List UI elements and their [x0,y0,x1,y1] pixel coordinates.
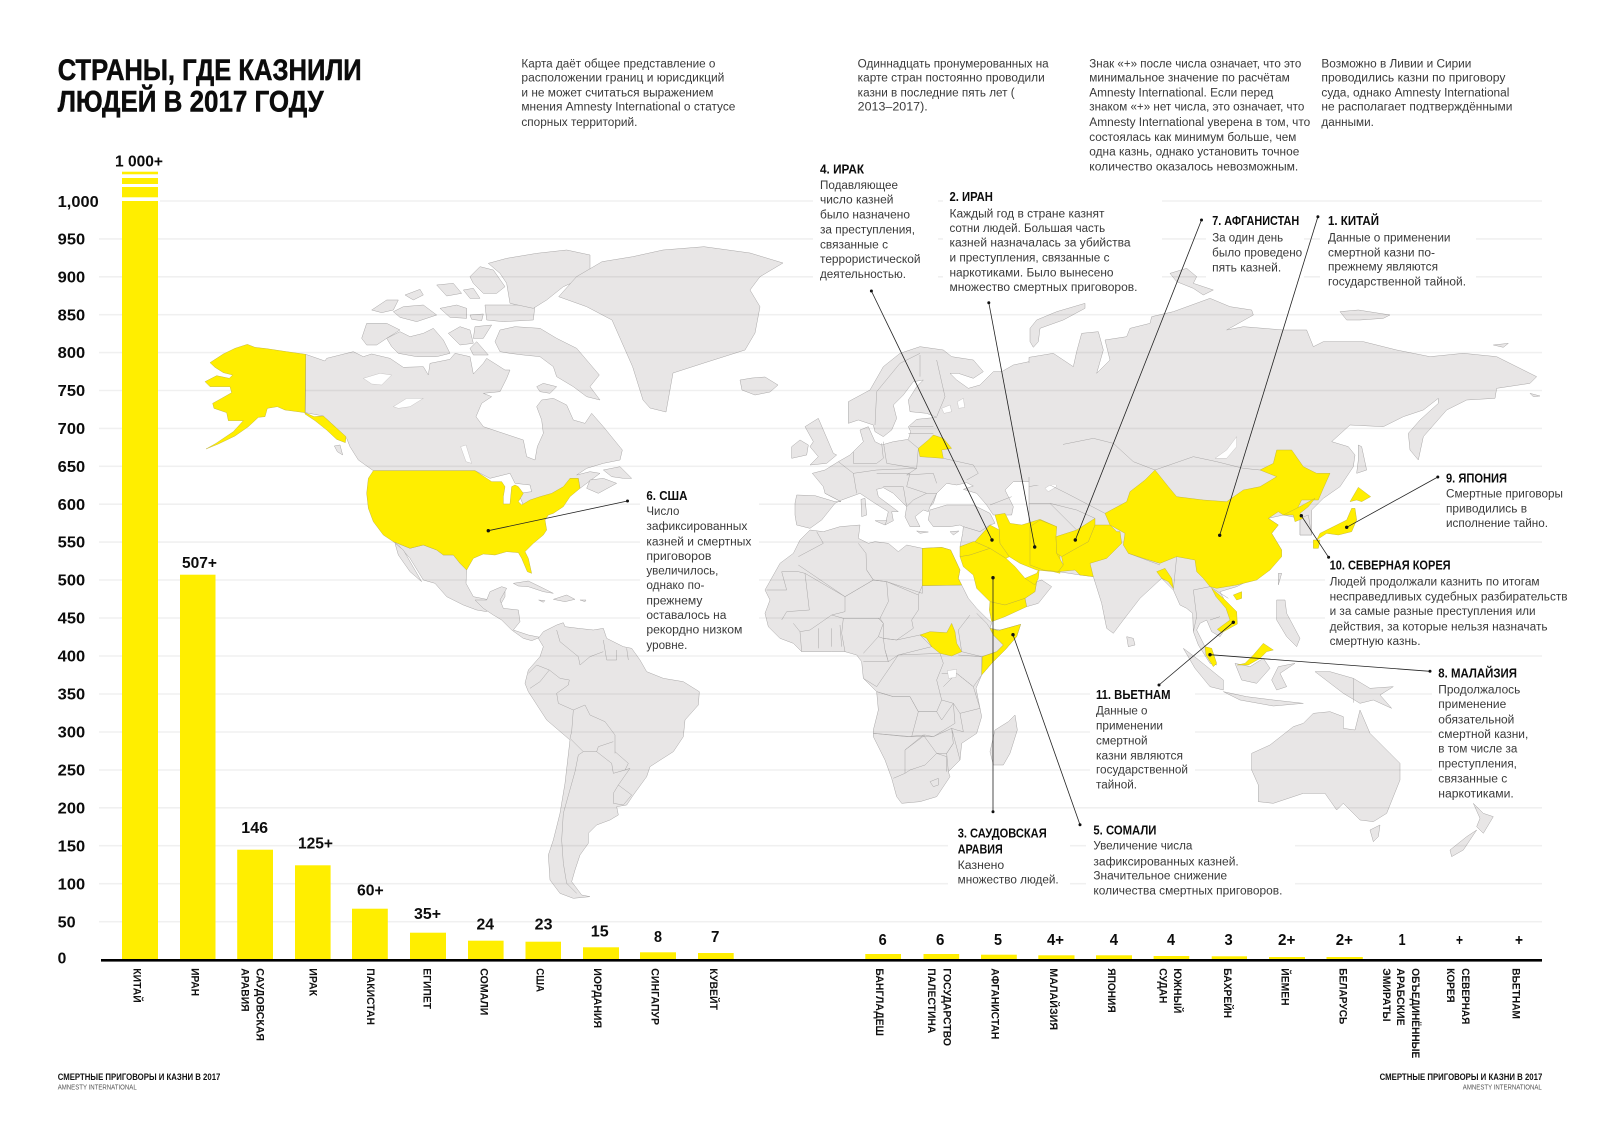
leader: Somalia [1011,633,1082,826]
bar chart: executions by country [101,172,1542,962]
y axis labels: 800 [58,345,85,362]
y axis labels [58,194,99,968]
country labels, rotated: ЯПОНИЯ [1105,968,1117,1013]
note: map disclaimer: расположении границ и юрисдикций [521,73,724,85]
leader: Iraq [870,290,994,542]
bar value labels: 15 [591,924,609,940]
country labels, rotated: СОМАЛИ [478,968,490,1015]
y axis labels: 950 [58,232,85,248]
callout: 5 Somalia: Значительное снижение [1093,871,1227,883]
bar value labels [115,154,1523,949]
callout: 9 Japan [1440,470,1565,532]
callout: 6 USA: увеличилось, [646,565,718,577]
callout: 8 Malaysia: преступления, [1438,758,1517,770]
footer right [1380,1072,1542,1092]
bar value labels: 60+ [357,882,384,900]
callout: 1 China: прежнему являются [1328,262,1438,274]
callout: 5 Somalia: зафиксированных казней. [1093,856,1239,868]
callout: 5 Somalia [1086,824,1295,897]
map: grey land masses [306,247,1540,898]
callout: 4 Iraq: за преступления, [820,225,915,237]
callout: 6 USA: 6. США [646,489,687,503]
callout: 2 Iran: 2. ИРАН [950,190,993,204]
leader: Japan [1345,476,1439,529]
callout: 5 Somalia: 5. СОМАЛИ [1093,824,1156,838]
country labels, rotated: КОРЕЯ [1444,968,1456,1003]
y axis labels: 650 [58,459,85,476]
note: numbered countries: казни в последние пять лет ( [858,87,1015,99]
footer left: СМЕРТНЫЕ ПРИГОВОРЫ И КАЗНИ В 2017 [58,1072,220,1083]
y axis labels: 250 [58,763,85,780]
note: plus sign: Знак «+» после числа означает, что это [1089,58,1301,70]
Oman [1025,580,1052,607]
y axis labels: 400 [58,649,85,666]
bar value labels: 4 [1110,932,1118,949]
callout: 7 Afghanistan [1206,210,1304,278]
country labels, rotated: ЭМИРАТЫ [1380,968,1392,1022]
bar value labels: 3 [1224,932,1233,949]
country labels, rotated: БЕЛАРУСЬ [1336,968,1348,1024]
note: Libya and Syria: не располагает подтверждёнными [1321,102,1512,114]
callout: 11 Vietnam: государственной [1096,765,1188,777]
callout: 10 North Korea: Людей продолжали казнить по итогам [1330,577,1540,589]
leader: Afghanistan [1074,218,1203,542]
bar value labels: 125+ [298,835,333,852]
callout: 9 Japan: Смертные приговоры [1446,489,1563,501]
y axis labels: 900 [58,269,85,286]
bar value labels: 1 000+ [115,154,163,170]
country labels, rotated: МАЛАЙЗИЯ [1047,968,1060,1030]
callout: 6 USA: прежнему [646,595,703,607]
note: plus sign: знаком «+» нет числа, это означает, что [1089,102,1304,114]
callout: 1 China [1320,210,1476,292]
callout: 4 Iraq: деятельностью. [820,269,906,281]
leader: Vietnam [1158,621,1235,686]
bar value labels: 2+ [1336,932,1353,949]
country labels, rotated: ЕГИПЕТ [420,968,432,1009]
bar value labels: + [1515,932,1523,949]
bar value labels: 35+ [414,906,441,923]
callout: 5 Somalia: Увеличение числа [1093,841,1193,853]
leader: Iran [987,301,1036,549]
bar value labels: 146 [241,820,268,837]
title: СТРАНЫ, ГДЕ КАЗНИЛИ [58,54,362,87]
country labels, rotated: БАНГЛАДЕШ [873,968,885,1036]
country labels, rotated: САУДОВСКАЯ [254,968,266,1041]
y axis labels: 0 [58,950,66,968]
callout: 6 USA: казней и смертных [646,536,752,548]
note: plus sign [1089,58,1310,174]
chart gridlines [99,201,1542,922]
note: plus sign: Amnesty International. Если перед [1089,87,1274,99]
Greenland [559,247,783,412]
y axis labels: 550 [58,535,85,552]
note: plus sign: количество оказалось невозможным. [1089,162,1298,174]
Asia land and borders [1029,268,1540,665]
y axis labels: 450 [58,611,85,628]
callout: 9 Japan: 9. ЯПОНИЯ [1446,471,1507,485]
callout: 10 North Korea: и за самые разные преступления или [1330,606,1536,618]
y axis labels: 500 [58,573,85,590]
callout: 2 Iran: казней назначалась за убийства [950,238,1131,250]
callout: 3 Saudi Arabia: АРАВИЯ [958,843,1003,857]
bar value labels: 507+ [182,555,217,572]
footer left [58,1072,220,1092]
footer right: СМЕРТНЫЕ ПРИГОВОРЫ И КАЗНИ В 2017 [1380,1072,1542,1083]
country labels, rotated: ЮЖНЫЙ [1171,968,1184,1013]
callout: 2 Iran: Каждый год в стране казнят [950,208,1105,220]
bar value labels: 24 [476,916,494,934]
callout: 4 Iraq: террористической [820,254,920,266]
note: map disclaimer [521,58,735,129]
callout: 2 Iran: наркотиками. Было вынесено [950,267,1114,279]
country labels, rotated: ПАЛЕСТИНА [925,968,937,1033]
South American borders [528,630,632,893]
callout: 4 Iraq: число казней [820,194,894,206]
note: numbered countries: Одиннадцать пронумерованных на [858,58,1049,70]
note: plus sign: Amnesty International уверена в том, что [1089,117,1310,129]
country labels, rotated: СЕВЕРНАЯ [1459,968,1471,1024]
callout: 8 Malaysia: наркотиками. [1438,788,1514,800]
callout: 11 Vietnam: тайной. [1096,779,1137,791]
callout: 2 Iran [943,190,1162,296]
callout: 1 China: Данные о применении [1328,232,1450,244]
bar value labels: 23 [535,916,553,934]
country labels, rotated: ИРАК [307,968,319,996]
callout: 8 Malaysia: связанные с [1438,773,1508,785]
callout: 10 North Korea: смертную казнь. [1330,636,1421,648]
callout: 2 Iran: и преступления, связанные с [950,253,1110,265]
callout: 11 Vietnam [1090,686,1195,791]
leader: USA [487,500,629,532]
callout: 4 Iraq: связанные с [820,240,888,252]
callout: 8 Malaysia: смертной казни, [1438,729,1528,741]
leader: Malaysia [1208,653,1432,673]
callout: 9 Japan: исполнение тайно. [1446,518,1548,530]
bar value labels: 1 [1398,932,1406,949]
North America land [306,250,632,612]
note: map disclaimer: мнения Amnesty International о статусе [521,102,735,114]
countries: Afghanistan, Pakistan, China, North Korea, Japan, Bangladesh [1030,450,1371,600]
y axis labels: 100 [58,876,85,893]
Caribbean and South America land [475,581,699,898]
country labels, rotated: ГОСУДАРСТВО [940,968,952,1046]
callout: 1 China: 1. КИТАЙ [1328,213,1379,228]
note: numbered countries [858,58,1049,114]
y axis labels: 850 [58,307,85,324]
callout: 10 North Korea: несправедливых судебных разбирательств [1330,591,1568,603]
callout: 8 Malaysia [1432,665,1542,801]
country labels, rotated: ИРАН [188,968,200,996]
callout: 7 Afghanistan: пять казней. [1212,262,1281,274]
y axis labels: 1,000 [58,194,99,211]
callout: 3 Saudi Arabia: Казнено [958,860,1004,872]
note: map disclaimer: Карта даёт общее представление о [521,58,715,70]
note: Libya and Syria: проводились казни по приговору [1321,73,1506,85]
leader: Saudi Arabia [991,576,995,813]
callout: 3 Saudi Arabia: 3. САУДОВСКАЯ [958,826,1047,840]
footer right: AMNESTY INTERNATIONAL [1463,1082,1542,1092]
country labels, rotated [131,968,1522,1058]
bar value labels: 4 [1167,932,1175,949]
bar value labels: + [1456,932,1463,949]
callout: 6 USA: зафиксированных [646,521,748,533]
note: Libya and Syria: суда, однако Amnesty International [1321,87,1509,99]
axis baseline [101,959,1542,962]
leader: North Korea [1300,514,1330,559]
callout: 6 USA: Число [646,506,679,518]
callout: 6 USA: оставалось на [646,610,727,622]
note: Libya and Syria: Возможно в Ливии и Сирии [1321,58,1471,70]
callout: 10 North Korea [1325,558,1570,650]
note: numbered countries: карте стран постоянно проводили [858,73,1045,85]
note: map disclaimer: спорных территорий. [521,117,637,129]
Iceland [740,377,778,395]
callout: 7 Afghanistan: 7. АФГАНИСТАН [1212,214,1299,228]
note: numbered countries: 2013–2017). [858,102,928,114]
bar value labels: 4+ [1047,932,1064,949]
country labels, rotated: АФГАНИСТАН [988,968,1000,1039]
callout: 11 Vietnam: применении [1096,720,1163,732]
country: USA with Alaska [205,344,580,573]
callout: 8 Malaysia: Продолжалось [1438,684,1520,696]
country labels, rotated: СУДАН [1157,968,1169,1003]
note: plus sign: состоялась как минимум больше, чем [1089,132,1296,144]
country labels, rotated: ПАКИСТАН [364,968,376,1025]
y axis labels: 350 [58,687,85,704]
country labels, rotated: КУВЕЙТ [707,968,720,1010]
callout: 8 Malaysia: обязательной [1438,714,1514,726]
countries: Egypt, South Sudan, Somalia [920,547,1021,675]
callout: 6 USA: приговоров [646,551,711,563]
callout: 3 Saudi Arabia [948,826,1070,888]
callout: 4 Iraq: 4. ИРАК [820,162,864,176]
callout: 10 North Korea: 10. СЕВЕРНАЯ КОРЕЯ [1330,558,1451,572]
note: plus sign: минимальное значение по расчётам [1089,73,1290,85]
bars: small values [865,954,1363,959]
country labels, rotated: ВЬЕТНАМ [1510,968,1522,1019]
y axis labels: 50 [58,914,76,931]
y axis labels: 750 [58,383,85,400]
callout: 7 Afghanistan: было проведено [1212,247,1302,259]
callout: 2 Iran: сотни людей. Большая часть [950,223,1105,235]
callout: 4 Iraq: Подавляющее [820,180,898,192]
callout: 8 Malaysia: применение [1438,699,1506,711]
y axis labels: 200 [58,800,85,817]
note: Libya and Syria: данными. [1321,117,1374,129]
note: map disclaimer: и не может считаться выражением [521,87,713,99]
callout: 1 China: смертной казни по- [1328,247,1435,259]
bar value labels: 5 [994,932,1002,949]
callout: 2 Iran: множество смертных приговоров. [950,282,1138,294]
title [58,54,362,118]
callout: 11 Vietnam: 11. ВЬЕТНАМ [1096,688,1170,702]
callout: 7 Afghanistan: За один день [1212,232,1283,244]
title: ЛЮДЕЙ В 2017 ГОДУ [58,84,324,118]
bar value labels: 7 [711,929,719,946]
callout: 9 Japan: приводились в [1446,503,1527,515]
callout: 5 Somalia: количества смертных приговоров. [1093,885,1282,897]
country labels, rotated: СИНГАПУР [648,968,660,1025]
callout: 3 Saudi Arabia: множество людей. [958,875,1059,887]
Africa land and borders [765,525,1021,803]
countries: Belarus, Iraq, Jordan, Saudi Arabia, UAE, Yemen, Iran [918,435,1060,622]
bar: China with broken top [122,172,158,959]
callout: 6 USA: рекордно низком [646,625,742,637]
note: Libya and Syria [1321,58,1512,129]
callout: 8 Malaysia: в том числе за [1438,743,1518,755]
callout: 4 Iraq: было назначено [820,210,910,222]
y axis labels: 150 [58,838,85,855]
country labels, rotated: ИОРДАНИЯ [591,968,603,1028]
bars: large values [180,575,734,959]
country labels, rotated: США [534,968,546,992]
country labels, rotated: АРАБСКИЕ [1394,968,1406,1026]
callout: 11 Vietnam: Данные о [1096,706,1148,718]
country labels, rotated: КИТАЙ [131,968,144,1003]
callout: 8 Malaysia: 8. МАЛАЙЗИЯ [1438,666,1517,681]
leader lines [487,215,1439,826]
callout: 11 Vietnam: смертной [1096,735,1148,747]
bar value labels: 6 [936,932,945,949]
leader: China [1218,215,1319,537]
callout: 1 China: государственной тайной. [1328,277,1466,289]
callout: 6 USA: однако по- [646,580,705,592]
country labels, rotated: ОБЪЕДИНЁННЫЕ [1409,968,1422,1058]
y axis labels: 300 [58,725,85,742]
bar value labels: 8 [654,929,662,946]
map: highlighted countries [205,344,1371,675]
callout: 11 Vietnam: казни являются [1096,750,1183,762]
Southeast Asia and Oceania land [1183,600,1493,857]
country labels, rotated: БАХРЕЙН [1221,968,1234,1018]
callout: 10 North Korea: действия, за которые нельзя назначать [1330,622,1548,634]
callout: 4 Iraq [813,162,938,285]
country labels, rotated: ЙЕМЕН [1279,968,1292,1006]
footer left: AMNESTY INTERNATIONAL [58,1082,137,1092]
bar value labels: 6 [879,932,887,949]
countries: Vietnam, Malaysia [1205,588,1273,667]
y axis labels: 600 [58,497,85,514]
callout: 6 USA [640,488,759,653]
country labels, rotated: АРАВИЯ [238,968,250,1012]
y axis labels: 700 [58,421,85,438]
bar value labels: 2+ [1278,932,1295,949]
callout: 6 USA: уровне. [646,640,687,652]
Europe land and borders [792,347,1060,547]
note: plus sign: одна казнь, однако установить точное [1089,147,1299,159]
